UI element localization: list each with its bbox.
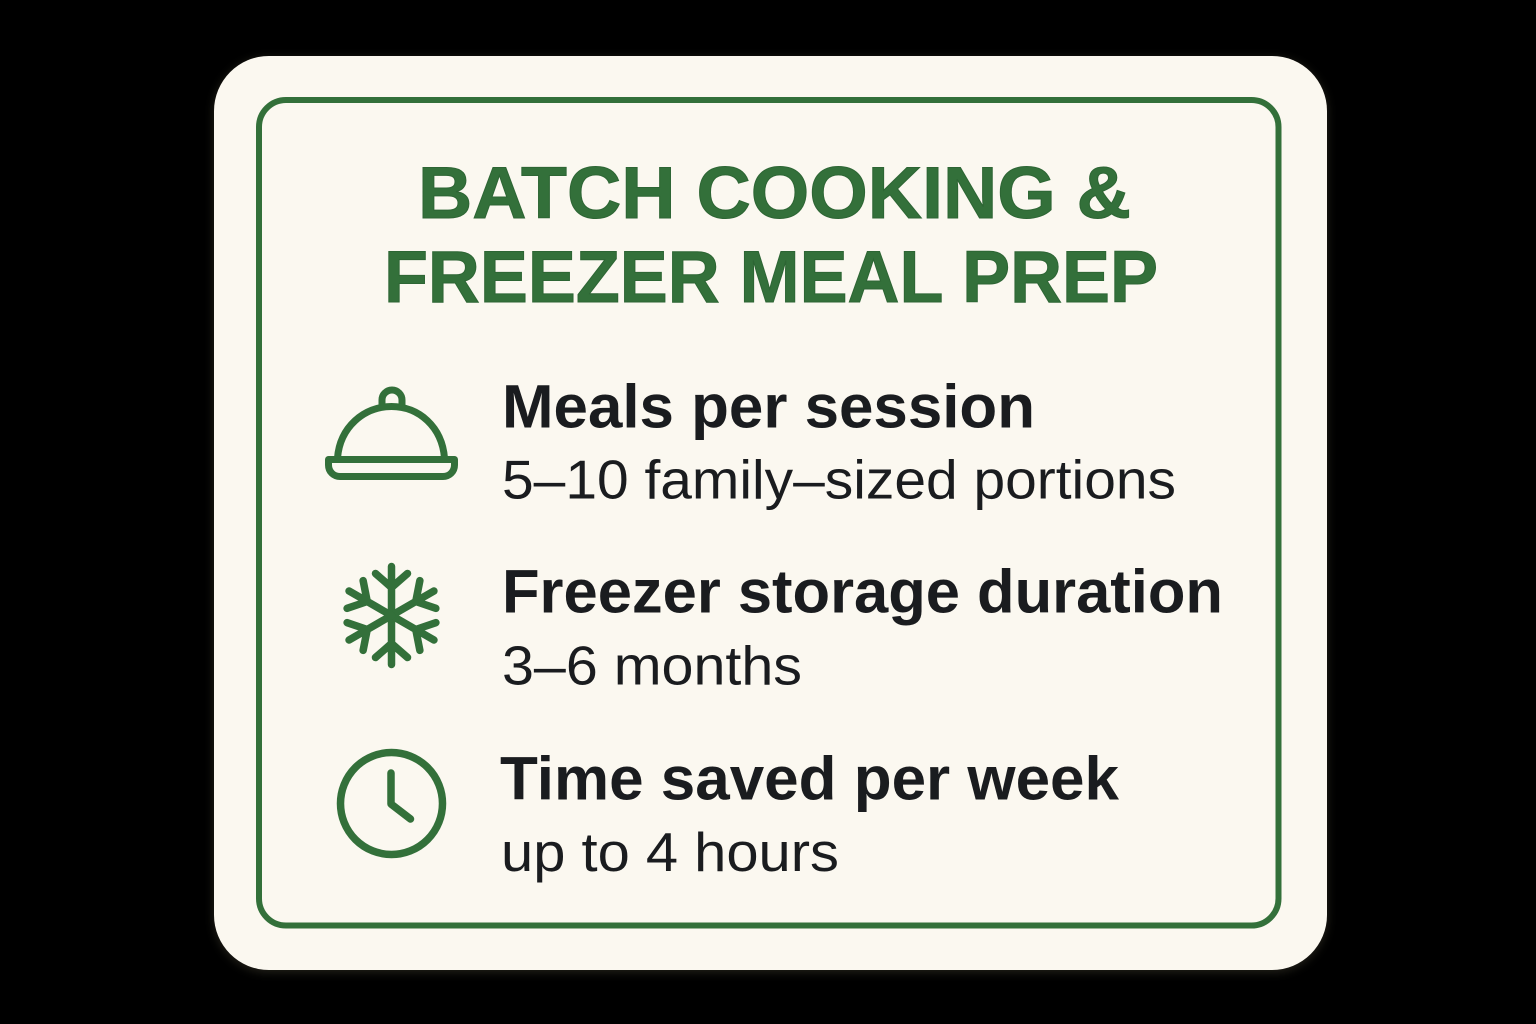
icon: serving cloche: [328, 390, 454, 476]
text block: meals per session: Meals per session: [502, 372, 1035, 440]
text block: time saved per week: Time saved per week: [500, 744, 1119, 812]
icon: snowflake: [341, 566, 442, 664]
icon: clock: [340, 752, 442, 854]
text block: time saved per week: [500, 744, 1119, 883]
text block: freezer storage duration: Freezer storage duration: [502, 558, 1223, 626]
title: FREEZER MEAL PREP: [384, 235, 1158, 318]
text block: meals per session: [502, 372, 1176, 510]
text block: meals per session: 5–10 family–sized portions: [502, 448, 1176, 510]
title: [384, 151, 1158, 318]
text block: freezer storage duration: [502, 558, 1223, 696]
title: BATCH COOKING &: [418, 151, 1131, 234]
panel: card: [214, 56, 1327, 972]
text block: time saved per week: up to 4 hours: [501, 821, 839, 883]
text block: freezer storage duration: 3–6 months: [502, 634, 802, 696]
